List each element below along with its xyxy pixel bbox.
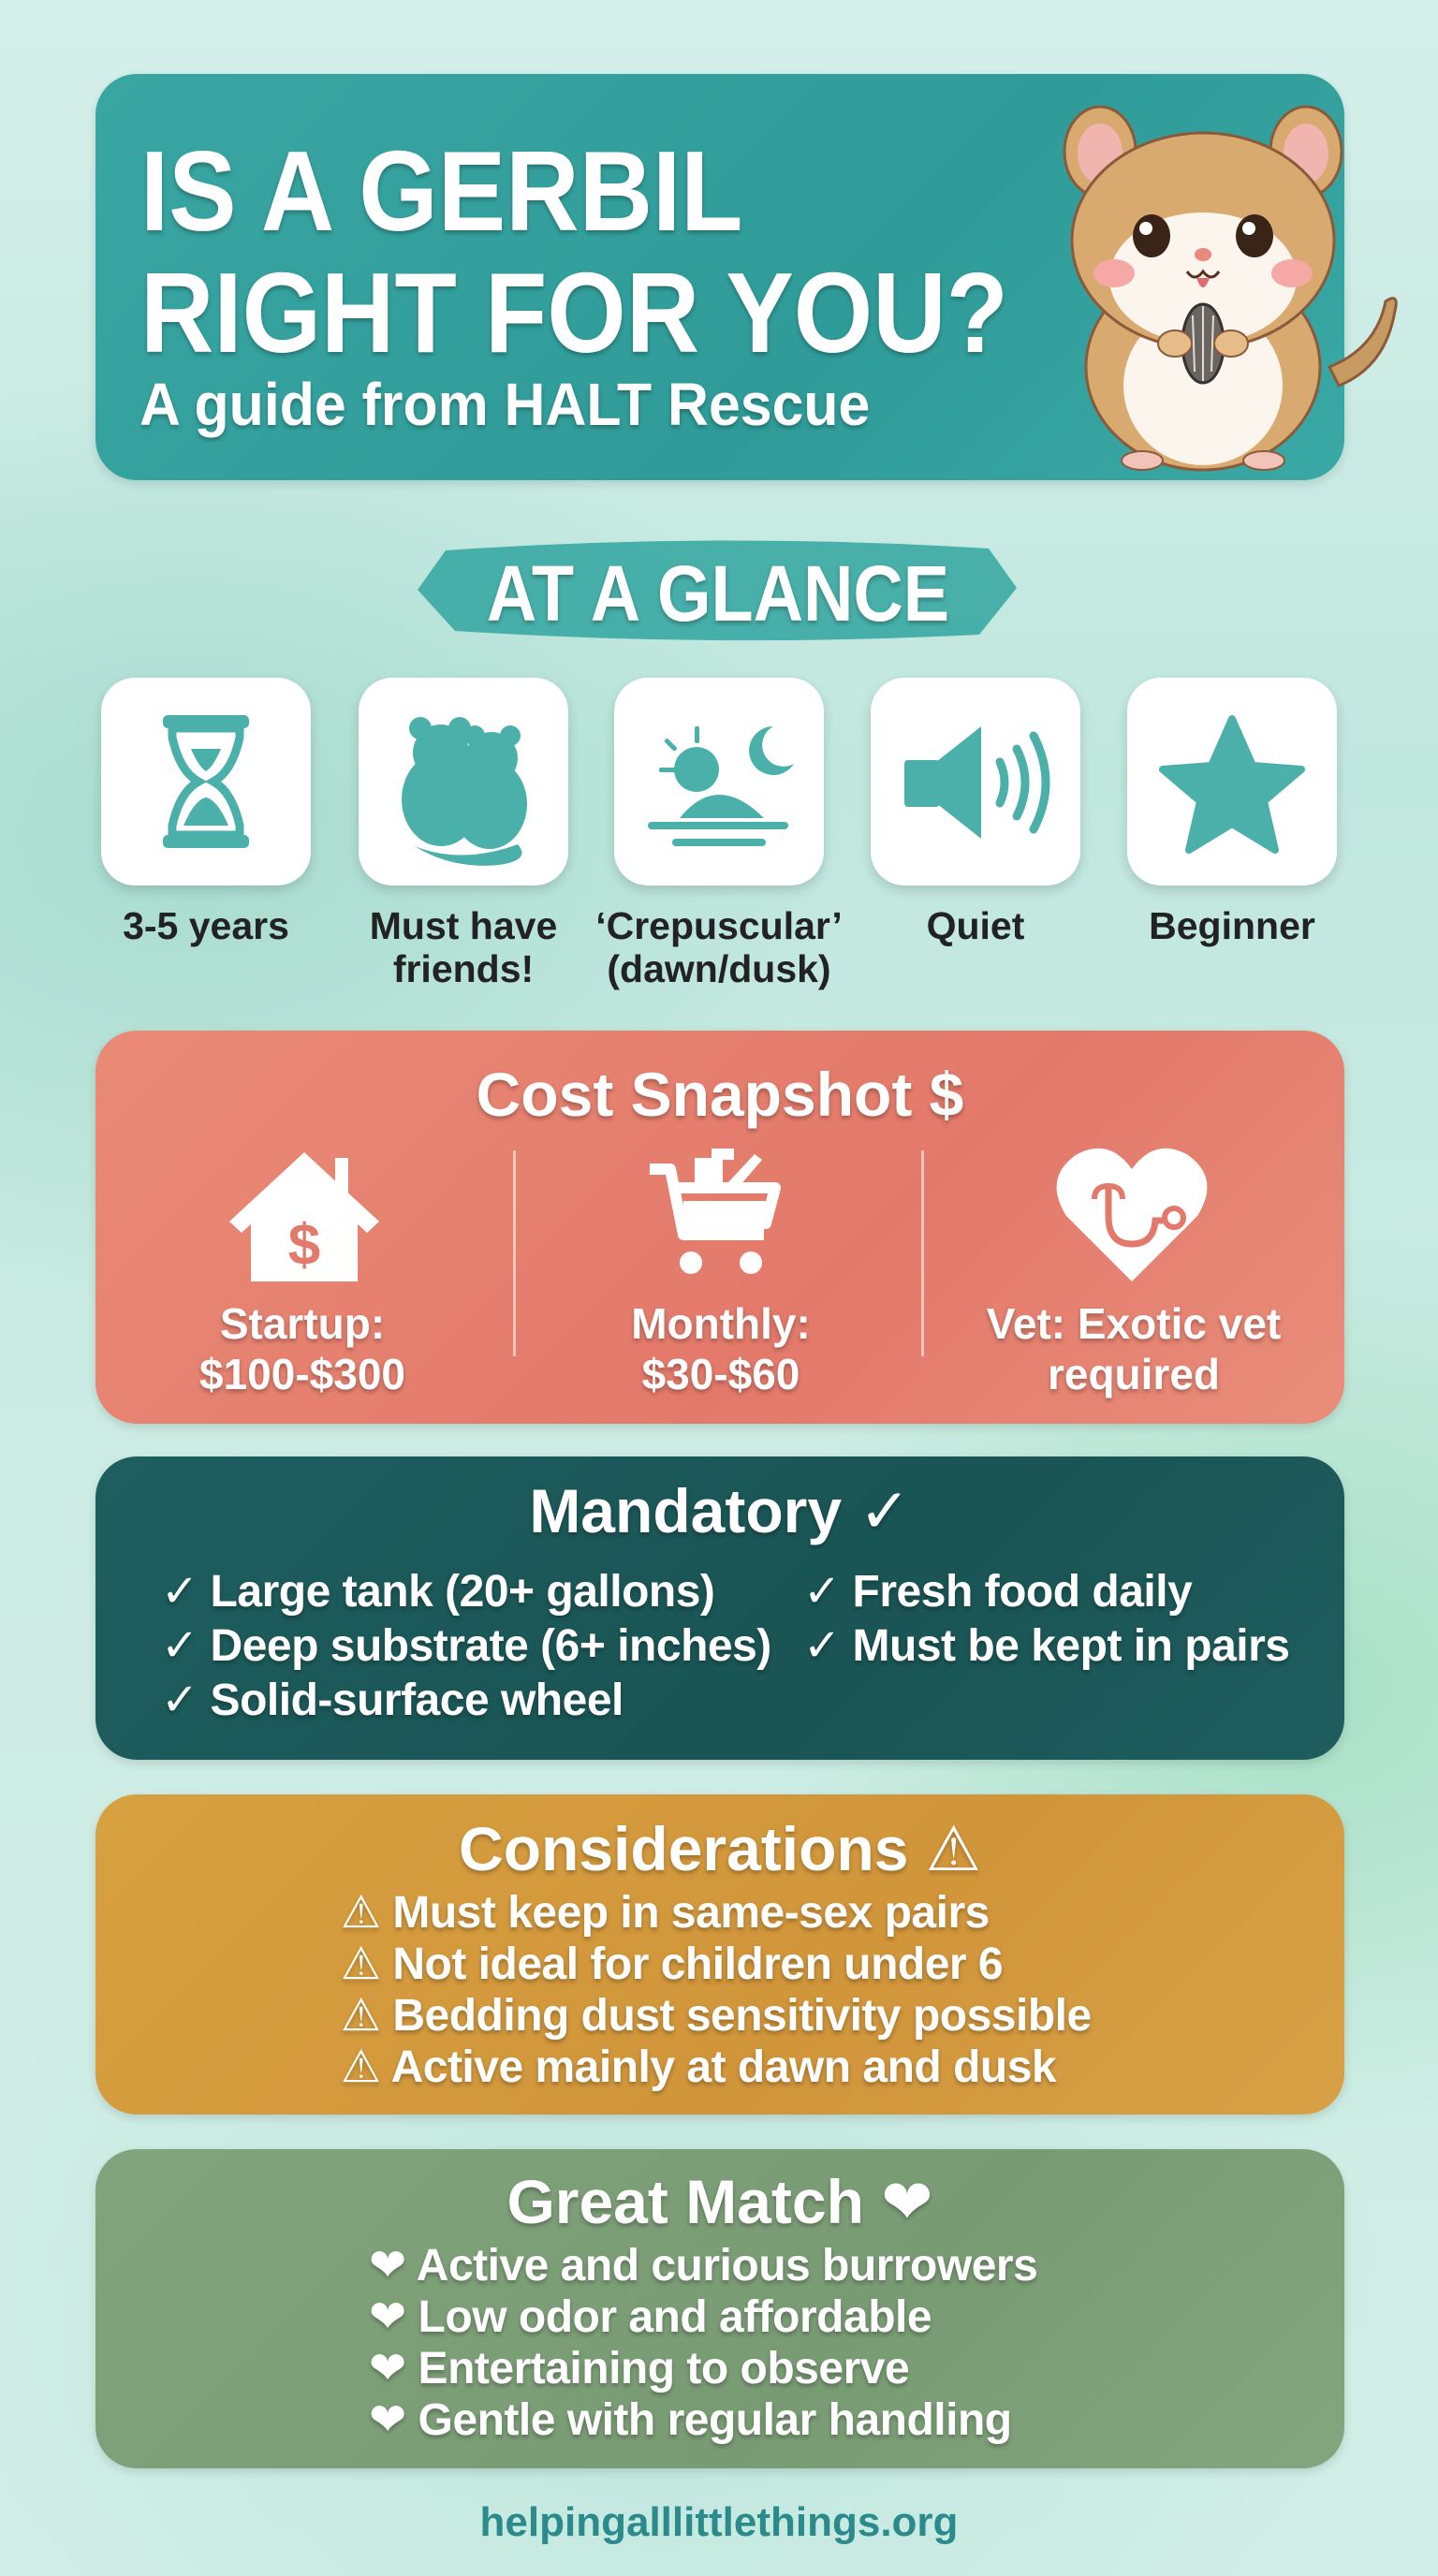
icon: house: $ [288, 1213, 320, 1278]
cost heading: Cost Snapshot $ [477, 1060, 963, 1129]
label: quiet: Quiet [927, 904, 1024, 947]
great match list: ❤ Low odor and affordable [369, 2292, 932, 2342]
panel: considerations [95, 1794, 1344, 2115]
panel: great match [95, 2149, 1344, 2468]
icon: heart stethoscope [1056, 1148, 1208, 1281]
panel: mandatory [95, 1456, 1344, 1760]
icon: speaker [871, 678, 1080, 886]
considerations list: ⚠ Must keep in same-sex pairs [341, 1888, 990, 1938]
mandatory heading: Mandatory ✓ [529, 1476, 911, 1545]
considerations list: ⚠ Not ideal for children under 6 [341, 1939, 1003, 1989]
subtitle: A guide from HALT Rescue [139, 371, 870, 438]
great match list: ❤ Active and curious burrowers [369, 2241, 1037, 2291]
vet: Vet: Exotic vet [987, 1299, 1281, 1348]
panel: cost snapshot [95, 1031, 1344, 1424]
great match list: ❤ Gentle with regular handling [369, 2395, 1012, 2445]
considerations list: ⚠ Active mainly at dawn and dusk [341, 2042, 1056, 2092]
considerations list [341, 1888, 1092, 2097]
illustration: gerbil [1064, 105, 1398, 472]
title text: IS A GERBIL [140, 127, 742, 255]
considerations list: ⚠ Bedding dust sensitivity possible [341, 1991, 1092, 2041]
monthly cost: Monthly: [631, 1299, 811, 1348]
mandatory list: ✓ Deep substrate (6+ inches) [161, 1621, 771, 1671]
icon: dawn/dusk [614, 678, 824, 886]
label: beginner: Beginner [1149, 904, 1315, 947]
icon: two gerbils [359, 678, 568, 886]
startup cost: $100-$300 [199, 1350, 405, 1398]
label: social: friends! [393, 947, 534, 990]
vet [985, 1299, 1283, 1403]
label: social: Must have [370, 904, 557, 947]
startup cost: Startup: [220, 1299, 385, 1348]
icon: cart [650, 1149, 781, 1274]
icon: star [1127, 678, 1337, 886]
mandatory list: ✓ Must be kept in pairs [803, 1621, 1289, 1671]
title text: RIGHT FOR YOU? [140, 249, 1008, 376]
title panel [95, 74, 1344, 480]
startup cost [198, 1299, 406, 1398]
vet: required [1048, 1350, 1220, 1398]
icon: house [229, 1152, 379, 1281]
label: crepuscular: ‘Crepuscular’ [595, 904, 843, 947]
great match list: ❤ Entertaining to observe [369, 2344, 909, 2393]
mandatory list: ✓ Fresh food daily [803, 1567, 1192, 1617]
mandatory list: ✓ Solid-surface wheel [161, 1676, 624, 1725]
great match heading: Great Match ❤ [506, 2167, 933, 2236]
heading: at a glance [418, 541, 1017, 640]
icon: hourglass [101, 678, 311, 886]
title text [140, 127, 1008, 376]
footer url: helpingalllittlethings.org [480, 2499, 958, 2545]
label: crepuscular: (dawn/dusk) [607, 947, 831, 990]
divider [513, 1150, 516, 1356]
label: lifespan: 3-5 years [123, 904, 289, 947]
considerations heading: Considerations ⚠ [459, 1814, 981, 1883]
label: social [370, 904, 557, 990]
monthly cost: $30-$60 [642, 1350, 800, 1398]
monthly cost [631, 1299, 811, 1398]
mandatory list: ✓ Large tank (20+ gallons) [161, 1567, 714, 1617]
mandatory list [161, 1567, 1289, 1725]
great match list [369, 2241, 1037, 2449]
label: crepuscular [595, 904, 843, 990]
heading: at a glance: AT A GLANCE [487, 549, 949, 637]
